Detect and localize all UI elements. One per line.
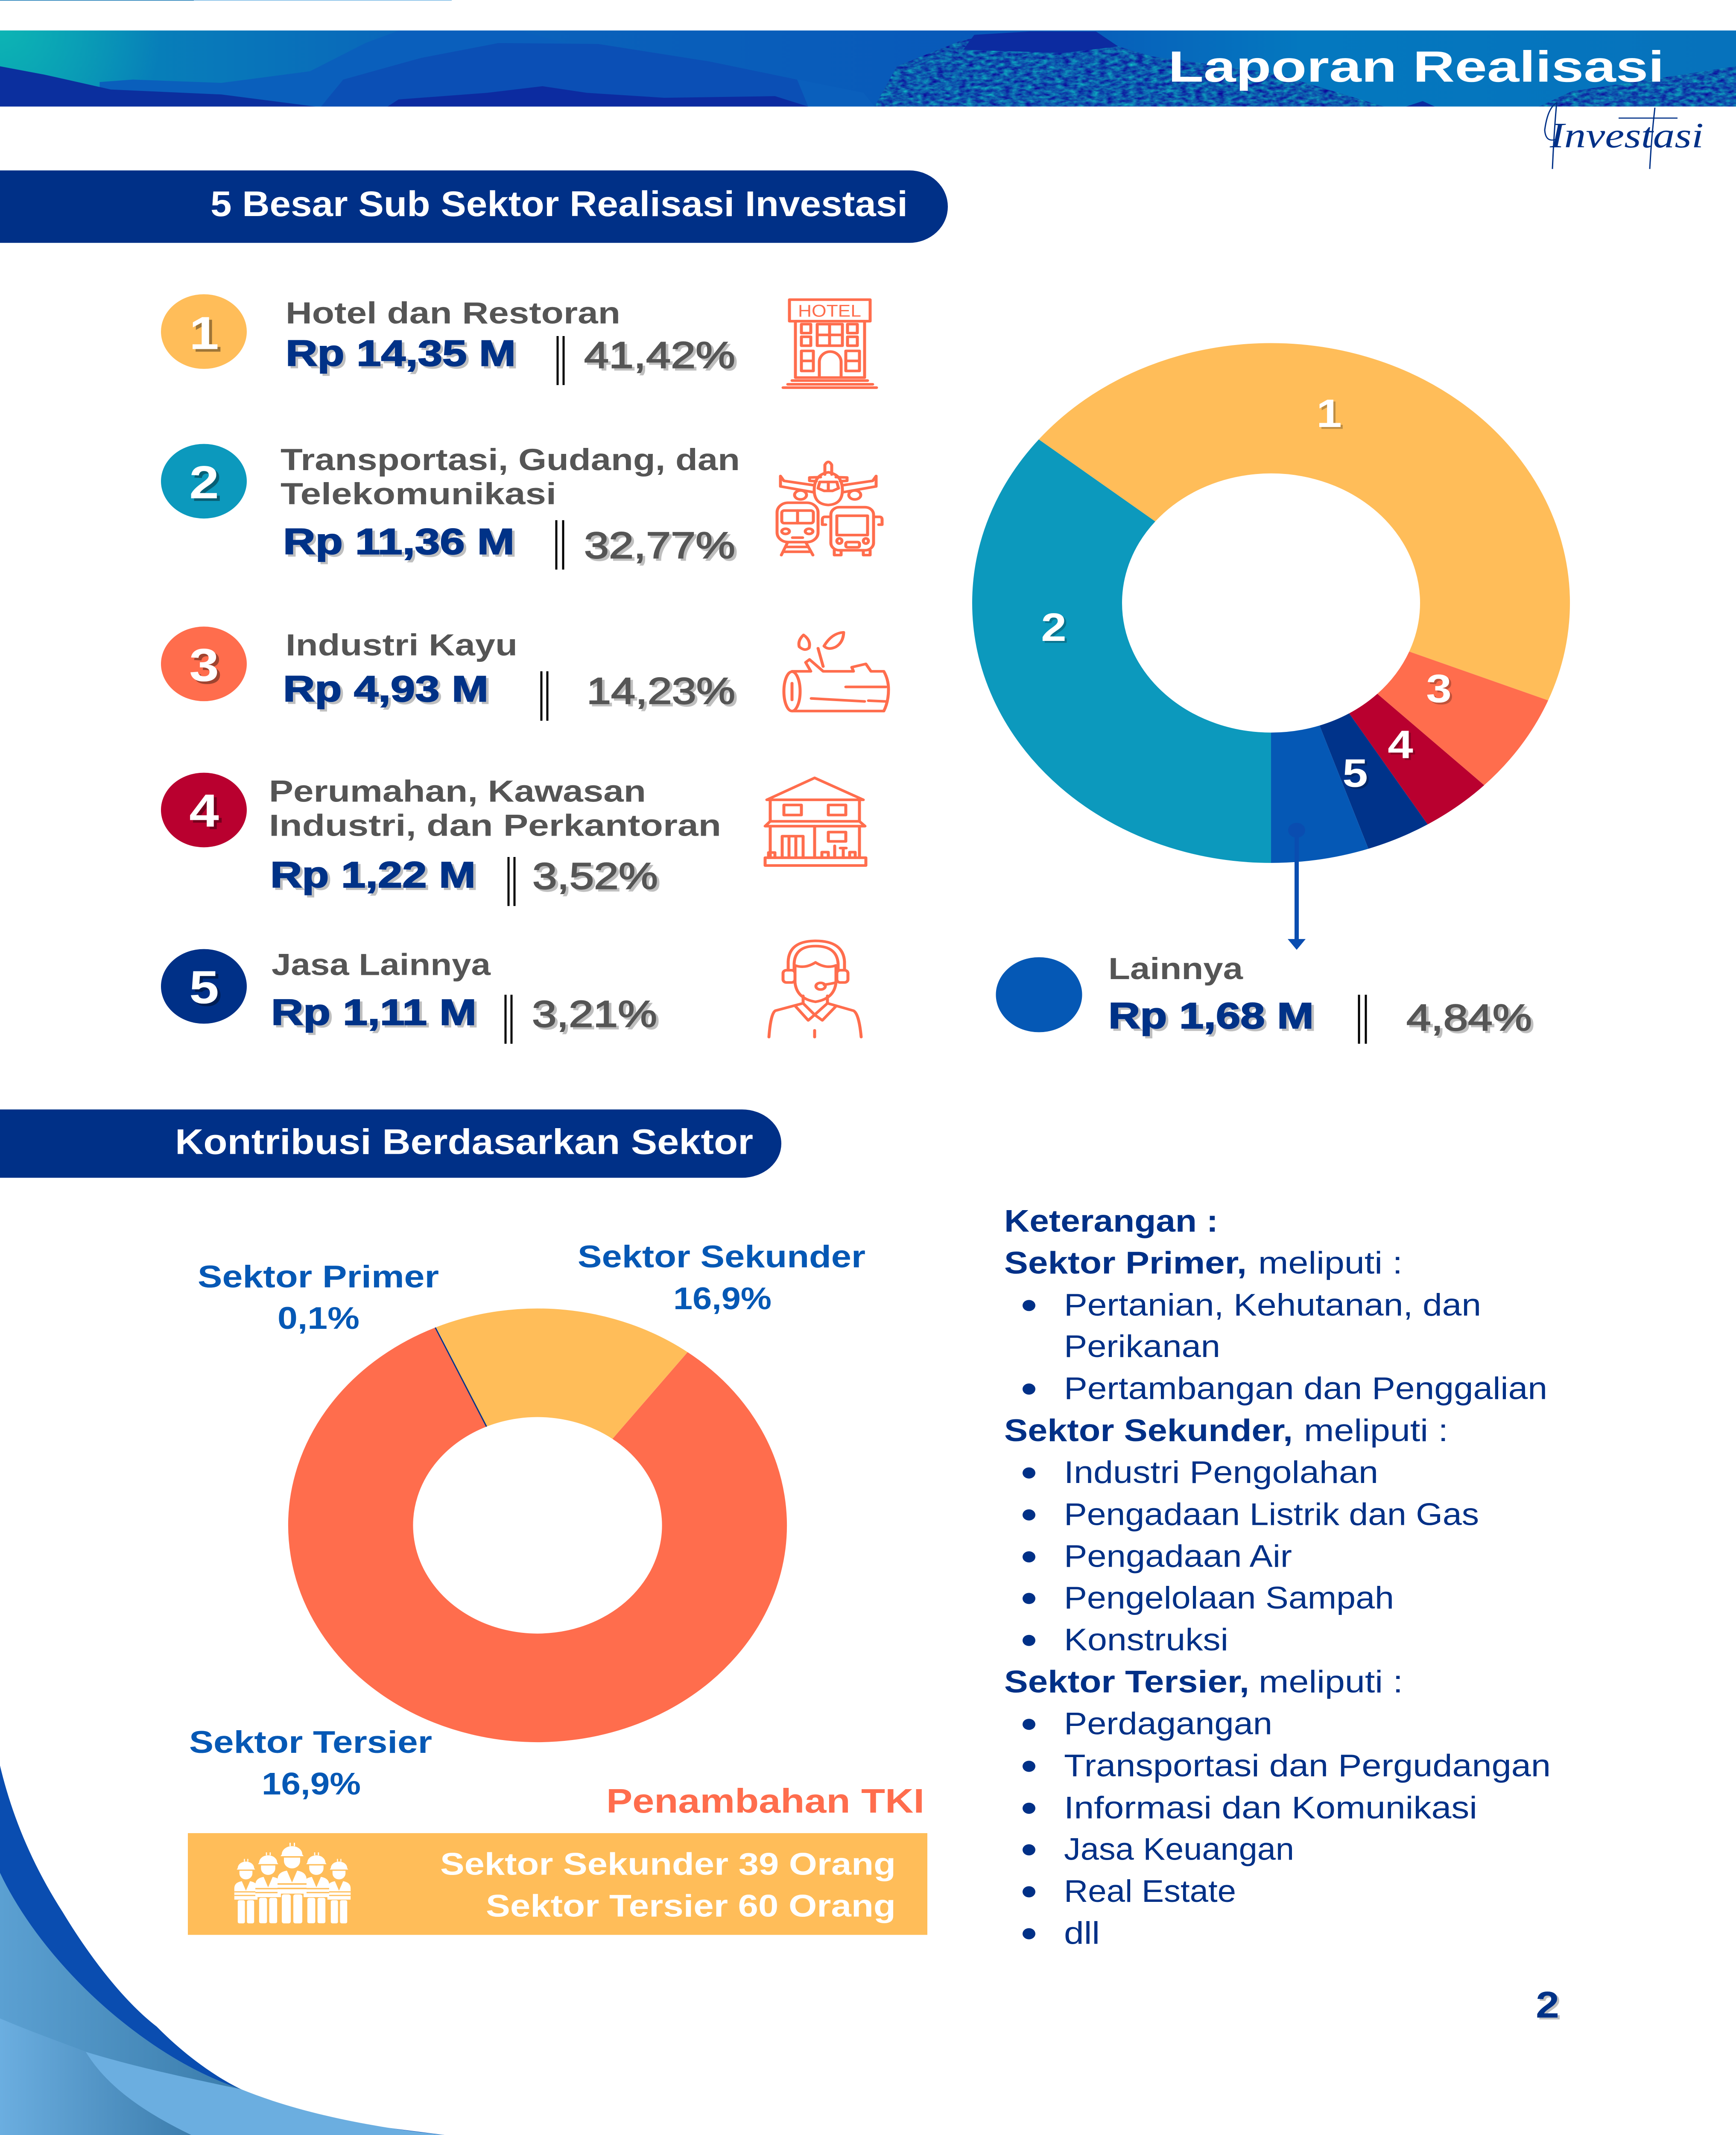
item 2: Transportasi: Telekomunikasi bbox=[281, 477, 556, 511]
icon: workers bbox=[234, 1843, 351, 1923]
heading: Penambahan TKI: Penambahan TKI bbox=[606, 1782, 924, 1820]
item 4: Perumahan: 3,52% bbox=[532, 855, 658, 897]
item 4: Perumahan bbox=[161, 773, 721, 906]
item 5: Jasa Lainnya: 5 bbox=[189, 961, 219, 1013]
label: Sektor Tersier bbox=[189, 1725, 432, 1801]
text block: Keterangan: Keterangan : bbox=[1004, 1203, 1218, 1238]
text block: Keterangan: Pengelolaan Sampah bbox=[1064, 1580, 1394, 1615]
donut slice numbers: 3 bbox=[1426, 667, 1452, 711]
item 1: Hotel dan Restoran: 1 bbox=[189, 307, 219, 359]
title: Laporan Realisasi: Laporan Realisasi bbox=[1168, 42, 1664, 91]
banner with mountain image bbox=[0, 30, 1736, 107]
item 3: Industri Kayu: 14,23% bbox=[587, 670, 735, 711]
item 2: Transportasi: Rp 11,36 M bbox=[283, 521, 514, 562]
text block: Keterangan: Pertanian, Kehutanan, dan bbox=[1064, 1287, 1481, 1322]
donut slice numbers: 4 bbox=[1388, 722, 1413, 767]
donut slice numbers: 5 bbox=[1342, 751, 1368, 796]
item 1: Hotel dan Restoran: Hotel dan Restoran bbox=[286, 296, 620, 330]
item 1: Hotel dan Restoran: 41,42% bbox=[584, 334, 735, 376]
panel: TKI box: Sektor Sekunder 39 Orang bbox=[440, 1847, 896, 1881]
label: Sektor Tersier: Sektor Tersier bbox=[189, 1725, 432, 1760]
legend: Lainnya: Lainnya bbox=[1108, 952, 1243, 986]
legend: Lainnya bbox=[996, 952, 1532, 1044]
item 5: Jasa Lainnya: Jasa Lainnya bbox=[272, 948, 491, 982]
subtitle: Investasi script: Investasi bbox=[1549, 116, 1704, 155]
text block: Keterangan: meliputi : bbox=[1259, 1664, 1403, 1699]
text block: Keterangan: Sektor Primer, bbox=[1004, 1246, 1247, 1280]
icon: call centre agent bbox=[769, 941, 861, 1037]
donut slice numbers: 1 bbox=[1316, 391, 1342, 436]
text block: Keterangan: Sektor Tersier, bbox=[1004, 1664, 1249, 1699]
text block: Keterangan: Perdagangan bbox=[1064, 1706, 1272, 1741]
text block: Keterangan: Sektor Sekunder, bbox=[1004, 1413, 1293, 1448]
text block: Keterangan: Pengadaan Air bbox=[1064, 1539, 1292, 1573]
item 2: Transportasi: Transportasi, Gudang, dan bbox=[281, 443, 740, 477]
item 4: Perumahan: Rp 1,22 M bbox=[270, 855, 476, 895]
text block: Keterangan: Konstruksi bbox=[1064, 1622, 1228, 1657]
donut slice numbers: 2 bbox=[1041, 605, 1067, 649]
icon: hotel bbox=[783, 300, 877, 388]
legend: Lainnya: 4,84% bbox=[1406, 997, 1532, 1038]
item 1: Hotel dan Restoran: Rp 14,35 M bbox=[286, 333, 516, 374]
label: Sektor Sekunder: Sektor Sekunder bbox=[578, 1239, 865, 1274]
item 3: Industri Kayu: Industri Kayu bbox=[286, 628, 517, 662]
label: Sektor Sekunder: 16,9% bbox=[673, 1281, 772, 1316]
label: Sektor Sekunder bbox=[578, 1239, 865, 1316]
label: Sektor Tersier: 16,9% bbox=[262, 1766, 361, 1801]
icon: hotel: HOTEL bbox=[798, 301, 861, 321]
text block: Keterangan: Industri Pengolahan bbox=[1064, 1455, 1378, 1490]
text block: Keterangan: meliputi : bbox=[1258, 1246, 1403, 1280]
icon: plane, train and bus bbox=[777, 462, 882, 555]
text block: Keterangan: meliputi : bbox=[1304, 1413, 1448, 1448]
heading: 5 Besar Sub Sektor: 5 Besar Sub Sektor Realisasi Investasi bbox=[210, 184, 908, 224]
decorative corner waves bbox=[0, 1766, 444, 2135]
item 4: Perumahan: Perumahan, Kawasan bbox=[269, 774, 646, 808]
text block: Keterangan: Real Estate bbox=[1064, 1874, 1236, 1909]
arrow: slice to Lainnya bbox=[1288, 823, 1306, 950]
item 2: Transportasi: 32,77% bbox=[584, 524, 735, 566]
text block: Keterangan: Informasi dan Komunikasi bbox=[1064, 1790, 1477, 1825]
heading: Kontribusi Berdasarkan Sektor bbox=[0, 1109, 781, 1178]
heading: Kontribusi Berdasarkan Sektor: Kontribusi Berdasarkan Sektor bbox=[175, 1122, 753, 1162]
chart: main donut bbox=[954, 328, 1588, 878]
donut slice numbers bbox=[1041, 391, 1452, 796]
top edge strip bbox=[0, 0, 452, 1]
text block: Keterangan bbox=[1004, 1203, 1551, 1951]
text block: Keterangan: Transportasi dan Pergudangan bbox=[1064, 1748, 1551, 1783]
icon: log with sprout bbox=[784, 632, 888, 711]
item 3: Industri Kayu: Rp 4,93 M bbox=[283, 669, 488, 709]
text block: Keterangan: Pengadaan Listrik dan Gas bbox=[1064, 1497, 1479, 1532]
text block: Keterangan: dll bbox=[1064, 1916, 1100, 1951]
subtitle: Investasi script bbox=[1545, 103, 1704, 169]
item 3: Industri Kayu: 3 bbox=[189, 639, 219, 691]
text block: Keterangan: Jasa Keuangan bbox=[1064, 1832, 1294, 1866]
item 2: Transportasi bbox=[161, 443, 740, 570]
panel: TKI box bbox=[188, 1833, 927, 1935]
item 4: Perumahan: Industri, dan Perkantoran bbox=[269, 808, 721, 842]
text block: Keterangan: Perikanan bbox=[1064, 1329, 1220, 1364]
icon: house bbox=[765, 778, 866, 866]
text block: Keterangan: Pertambangan dan Penggalian bbox=[1064, 1371, 1547, 1406]
item 5: Jasa Lainnya: 3,21% bbox=[532, 993, 657, 1035]
panel: TKI box: Sektor Tersier 60 Orang bbox=[486, 1889, 896, 1923]
item 5: Jasa Lainnya bbox=[161, 948, 657, 1044]
item 3: Industri Kayu bbox=[161, 626, 735, 721]
item 4: Perumahan: 4 bbox=[189, 784, 219, 836]
label: Sektor Primer: Sektor Primer bbox=[198, 1259, 439, 1294]
chart: sector donut bbox=[276, 1298, 799, 1753]
item 2: Transportasi: 2 bbox=[189, 456, 219, 508]
label: Sektor Primer bbox=[198, 1259, 439, 1336]
heading: 5 Besar Sub Sektor bbox=[0, 170, 948, 243]
page number: 2 bbox=[1536, 1984, 1559, 2026]
legend: Lainnya: Rp 1,68 M bbox=[1108, 996, 1314, 1036]
item 5: Jasa Lainnya: Rp 1,11 M bbox=[271, 992, 476, 1033]
label: Sektor Primer: 0,1% bbox=[278, 1301, 359, 1336]
item 1: Hotel dan Restoran bbox=[161, 294, 735, 385]
